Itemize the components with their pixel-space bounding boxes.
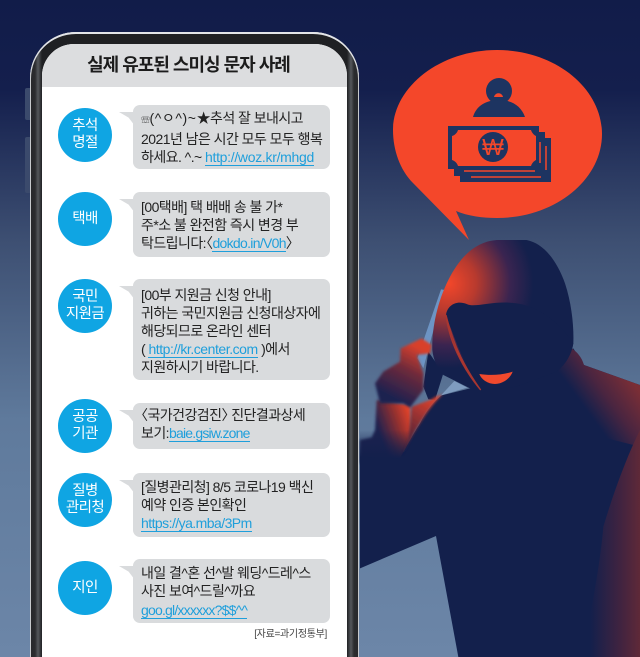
message bubble: 하세요. ^.~ http://woz.kr/mhgd [141, 149, 314, 165]
sleeve highlight [582, 430, 640, 657]
message bubble: [00택배] 택 배배 송 불 가* [141, 199, 282, 215]
label: 추석 명절: 명절 [72, 135, 98, 151]
label: 추석 명절 [58, 108, 112, 162]
gap under hood [441, 381, 467, 395]
phone frame [30, 32, 359, 657]
message bubble: 예약 인증 본인확인 [141, 497, 246, 513]
label: 공공기관: 기관 [72, 426, 98, 442]
label: 공공기관: 공공 [72, 409, 98, 425]
label: 국민지원금: 국민 [72, 289, 98, 305]
speech bubble [393, 50, 602, 240]
label: 지인: 지인 [72, 580, 98, 596]
shoulder highlight [557, 348, 640, 447]
message bubble: 지원하시기 바랍니다. [141, 359, 259, 375]
message bubble [133, 403, 330, 449]
label: 질병관리청: 질병 [72, 483, 98, 499]
message bubble: 해당되므로 온라인 센터 [141, 323, 271, 339]
panel: 택배 [58, 192, 330, 257]
message bubble [133, 279, 330, 380]
label: 국민지원금: 지원금 [66, 306, 104, 322]
label: 국민지원금 [58, 279, 112, 333]
panel: 국민지원금 [58, 279, 330, 380]
message bubble: goo.gl/xxxxxx?$$^^ [141, 602, 247, 618]
message bubble: ( http://kr.center.com )에서 [141, 341, 290, 357]
label: 질병관리청 [58, 473, 112, 527]
hood [432, 240, 573, 390]
panel: 지인 [58, 559, 330, 623]
message bubble: 내일 결^혼 선^발 웨딩^드레^스 [141, 565, 311, 581]
message bubble: 〈국가건강검진〉 진단결과상세 [134, 407, 305, 423]
hand [375, 338, 432, 408]
inner hood strip [446, 315, 481, 390]
label: 추석 명절: 추석 [72, 118, 98, 134]
message bubble: [질병관리청] 8/5 코로나19 백신 [141, 479, 313, 495]
heading bar: 실제 유포된 스미싱 문자 사례 [87, 55, 290, 75]
forearm [360, 400, 412, 463]
message bubble: 사진 보여^드릴^까요 [141, 583, 255, 599]
label: 지인 [58, 561, 112, 615]
face shadow [446, 303, 573, 390]
icon: won banknotes: ₩ [482, 134, 504, 160]
message bubble: 귀하는 국민지원금 신청대상자에 [141, 305, 320, 321]
side button lower [25, 137, 32, 193]
heading bar [42, 44, 347, 87]
label: 택배 [58, 192, 112, 246]
message bubble [133, 105, 330, 169]
icon: person [473, 78, 525, 117]
message bubble: 탁드립니다:〈dokdo.in/V0h〉 [141, 235, 299, 251]
message bubble [133, 192, 330, 257]
message bubble: 2021년 남은 시간 모두 모두 행복 [141, 130, 322, 146]
side buttons [25, 88, 32, 120]
panel: 질병관리청 [58, 473, 330, 537]
glowing neck [402, 394, 443, 457]
source note: [자료=과기정통부] [254, 629, 327, 640]
label: 택배: 택배 [72, 210, 98, 226]
message bubble [133, 559, 330, 623]
panel: 추석 명절 [58, 105, 330, 169]
message bubble: [00부 지원금 신청 안내] [141, 287, 271, 303]
label: 공공기관 [58, 399, 112, 453]
message bubble [133, 473, 330, 537]
message bubble: ☏(^ㅇ^)~★추석 잘 보내시고 [141, 110, 303, 126]
message bubble: 보기:baie.gsiw.zone [141, 425, 250, 441]
illustration: hooded figure [360, 240, 640, 657]
label: 질병관리청: 관리청 [66, 500, 104, 516]
panel: 공공기관 [58, 399, 330, 453]
phone screen [42, 44, 347, 657]
message bubble: https://ya.mba/3Pm [141, 515, 252, 531]
icon: won banknotes [448, 126, 551, 182]
phone in hand [417, 289, 445, 368]
body [360, 348, 640, 657]
message bubble: 주*소 불 완전함 즉시 변경 부 [141, 217, 298, 233]
glowing chin [479, 372, 513, 384]
